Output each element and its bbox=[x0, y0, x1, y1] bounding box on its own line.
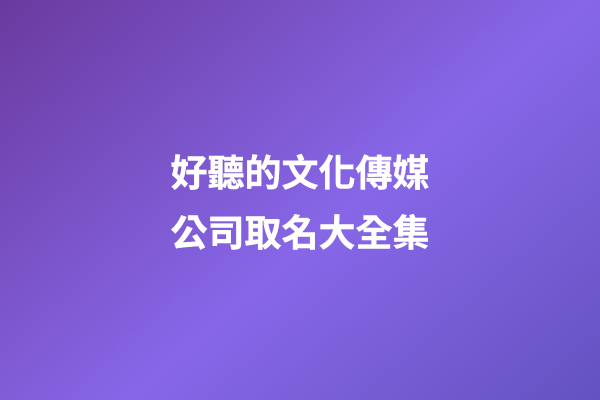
title line 2: 公司取名大全集 bbox=[170, 213, 430, 254]
title line 1: 好聽的文化傳媒 bbox=[170, 153, 430, 194]
title bbox=[170, 153, 430, 254]
